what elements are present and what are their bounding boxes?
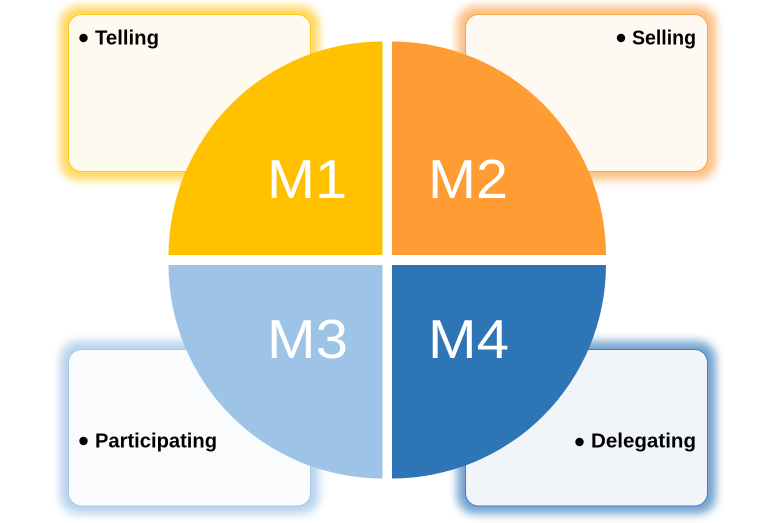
panel: Delegating <box>457 341 716 514</box>
quadrant: M1 <box>168 42 382 255</box>
panel: Delegating: Delegating <box>591 430 696 452</box>
panel: Selling <box>457 6 716 180</box>
quadrant: M4 <box>392 265 606 478</box>
panel: Telling: Telling <box>95 28 159 50</box>
panel: Participating <box>60 341 319 514</box>
quadrant: M2 <box>392 42 606 255</box>
panel: Selling: Selling <box>632 28 696 50</box>
quadrant: M2: M2 <box>428 148 508 210</box>
panel: Telling <box>60 6 319 180</box>
quadrant: M1: M1 <box>267 148 347 210</box>
panel: Participating: Participating <box>95 430 217 452</box>
quadrant: M3 <box>168 265 382 478</box>
quadrant: M4: M4 <box>428 308 509 370</box>
quadrant: M3: M3 <box>267 308 348 370</box>
